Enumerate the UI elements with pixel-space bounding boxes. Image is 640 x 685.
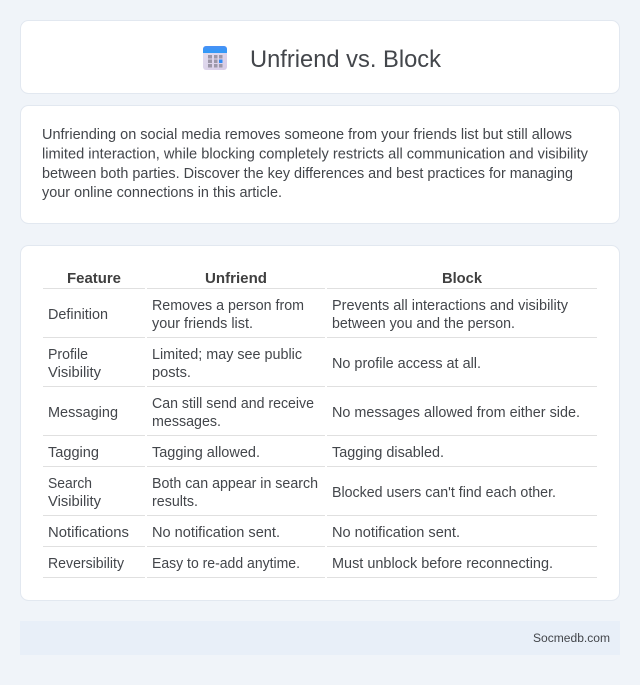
row: profile visibility: No profile access at all. — [332, 356, 481, 372]
table header: Unfriend — [205, 270, 267, 287]
row: tagging: Tagging — [48, 445, 99, 461]
row: search visibility: Both can appear in search — [152, 476, 318, 492]
title: Unfriend vs. Block — [250, 46, 442, 73]
row: reversibility: Easy to re-add anytime. — [152, 556, 300, 572]
row: reversibility: Reversibility — [48, 556, 125, 572]
row: tagging: Tagging allowed. — [152, 445, 260, 461]
table header: Feature — [67, 270, 121, 287]
table header: Block — [442, 270, 483, 287]
intro paragraph: between both parties. Discover the key differences and best practices for managing — [42, 166, 573, 182]
row: notifications: No notification sent. — [332, 525, 460, 541]
row: search visibility: Blocked users can't find each other. — [332, 485, 556, 501]
row: profile visibility: Visibility — [48, 365, 102, 381]
row: definition: your friends list. — [152, 316, 253, 332]
icon: calendar — [203, 46, 227, 70]
panel: intro — [20, 106, 620, 224]
row: profile visibility: Profile — [48, 347, 88, 363]
row: search visibility: Visibility — [48, 494, 102, 510]
row: definition — [48, 298, 569, 332]
row: notifications: No notification sent. — [152, 525, 280, 541]
row: reversibility: Must unblock before reconnecting. — [332, 556, 553, 572]
row: messaging — [48, 396, 580, 430]
intro paragraph: Unfriending on social media removes someone from your friends list but still allows — [42, 127, 572, 143]
intro paragraph — [42, 127, 589, 201]
row: notifications: Notifications — [48, 525, 129, 541]
row: notifications — [48, 525, 460, 541]
row: search visibility — [48, 476, 556, 510]
row: search visibility: results. — [152, 494, 198, 510]
row: reversibility — [48, 556, 553, 572]
footer bar — [20, 621, 620, 655]
intro paragraph: limited interaction, while blocking completely restricts all communication and visibility — [42, 146, 589, 162]
intro paragraph: your online connections in this article. — [42, 185, 282, 201]
row: definition: Prevents all interactions and visibility — [332, 298, 569, 314]
row: messaging: Messaging — [48, 405, 118, 421]
row: search visibility: Search — [48, 476, 92, 492]
row: messaging: No messages allowed from either side. — [332, 405, 580, 421]
row: profile visibility — [48, 347, 481, 381]
footer text: Socmedb.com — [533, 631, 610, 645]
table header — [67, 270, 483, 287]
row: tagging — [48, 445, 444, 461]
row: profile visibility: posts. — [152, 365, 191, 381]
panel: title card — [20, 20, 620, 94]
panel: comparison table — [20, 246, 620, 600]
row: definition: Definition — [48, 307, 108, 323]
row: tagging: Tagging disabled. — [332, 445, 444, 461]
row: profile visibility: Limited; may see public — [152, 347, 302, 363]
row: definition: between you and the person. — [332, 316, 515, 332]
row: definition: Removes a person from — [152, 298, 304, 314]
row: messaging: Can still send and receive — [152, 396, 314, 412]
row: messaging: messages. — [152, 414, 221, 430]
